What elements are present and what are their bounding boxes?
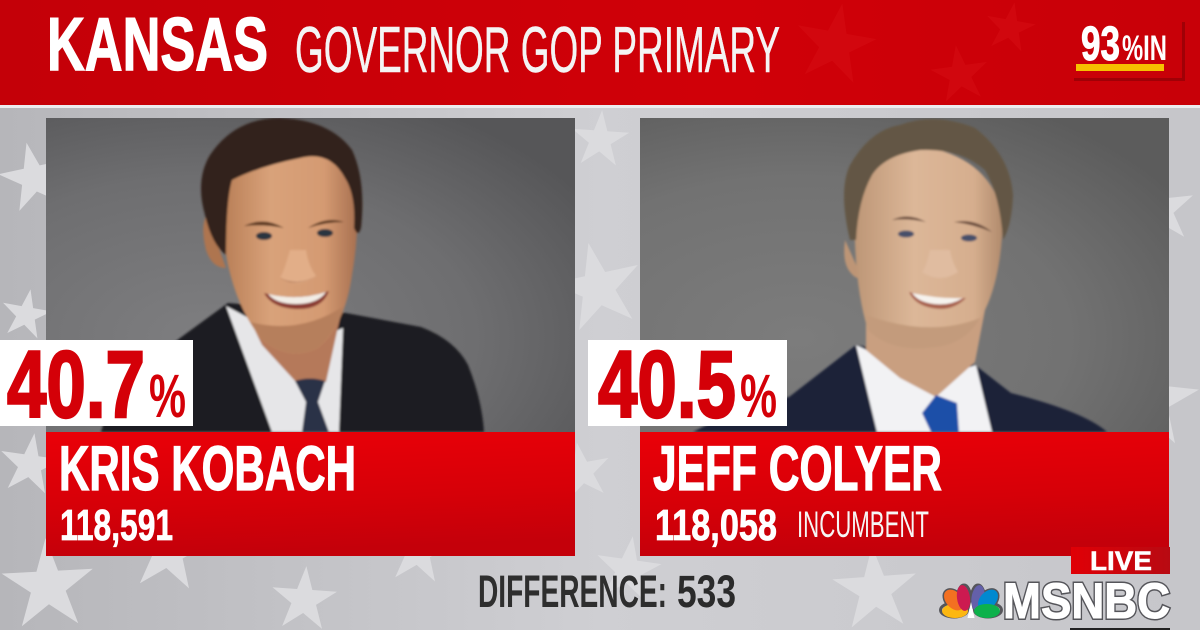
vote share: 40.5%: %: [740, 362, 777, 430]
photo: Kris Kobach portrait: [46, 118, 575, 432]
percent reporting badge: %IN: [1122, 29, 1167, 68]
live badge: LIVE: [1090, 546, 1152, 576]
icon: MSNBC peacock: [940, 584, 1002, 618]
header bar: [0, 0, 1200, 108]
vote count: 118,058: [655, 501, 777, 550]
name banner: Kris Kobach: [46, 432, 575, 556]
title: Kansas: KANSAS: [47, 2, 268, 86]
incumbent tag: INCUMBENT: [797, 504, 929, 545]
candidate name: KRIS KOBACH: [59, 434, 356, 504]
panel: Jeff Colyer: [588, 118, 1169, 556]
logo: MSNBC wordmark: MSNBC: [1003, 573, 1170, 629]
vote difference: 533: [677, 566, 736, 617]
vote share: 40.7%: 40.7: [7, 332, 145, 438]
live badge: [1071, 546, 1170, 576]
panel: Kris Kobach: [0, 118, 575, 556]
vote share: 40.7%: %: [149, 362, 186, 430]
percent reporting badge: [1074, 18, 1185, 81]
vote share: 40.5%: 40.5: [598, 332, 736, 438]
photo: Jeff Colyer portrait: [640, 118, 1169, 432]
vote count: 118,591: [60, 501, 173, 550]
candidate name: JEFF COLYER: [653, 434, 942, 504]
percent reporting badge: 93: [1081, 18, 1120, 71]
logo: MSNBC wordmark: MSNBC: [1003, 573, 1170, 629]
subtitle: Governor GOP Primary: GOVERNOR GOP PRIMARY: [295, 13, 780, 86]
name banner: Jeff Colyer: [640, 432, 1169, 556]
vote difference: DIFFERENCE:: [478, 566, 667, 617]
